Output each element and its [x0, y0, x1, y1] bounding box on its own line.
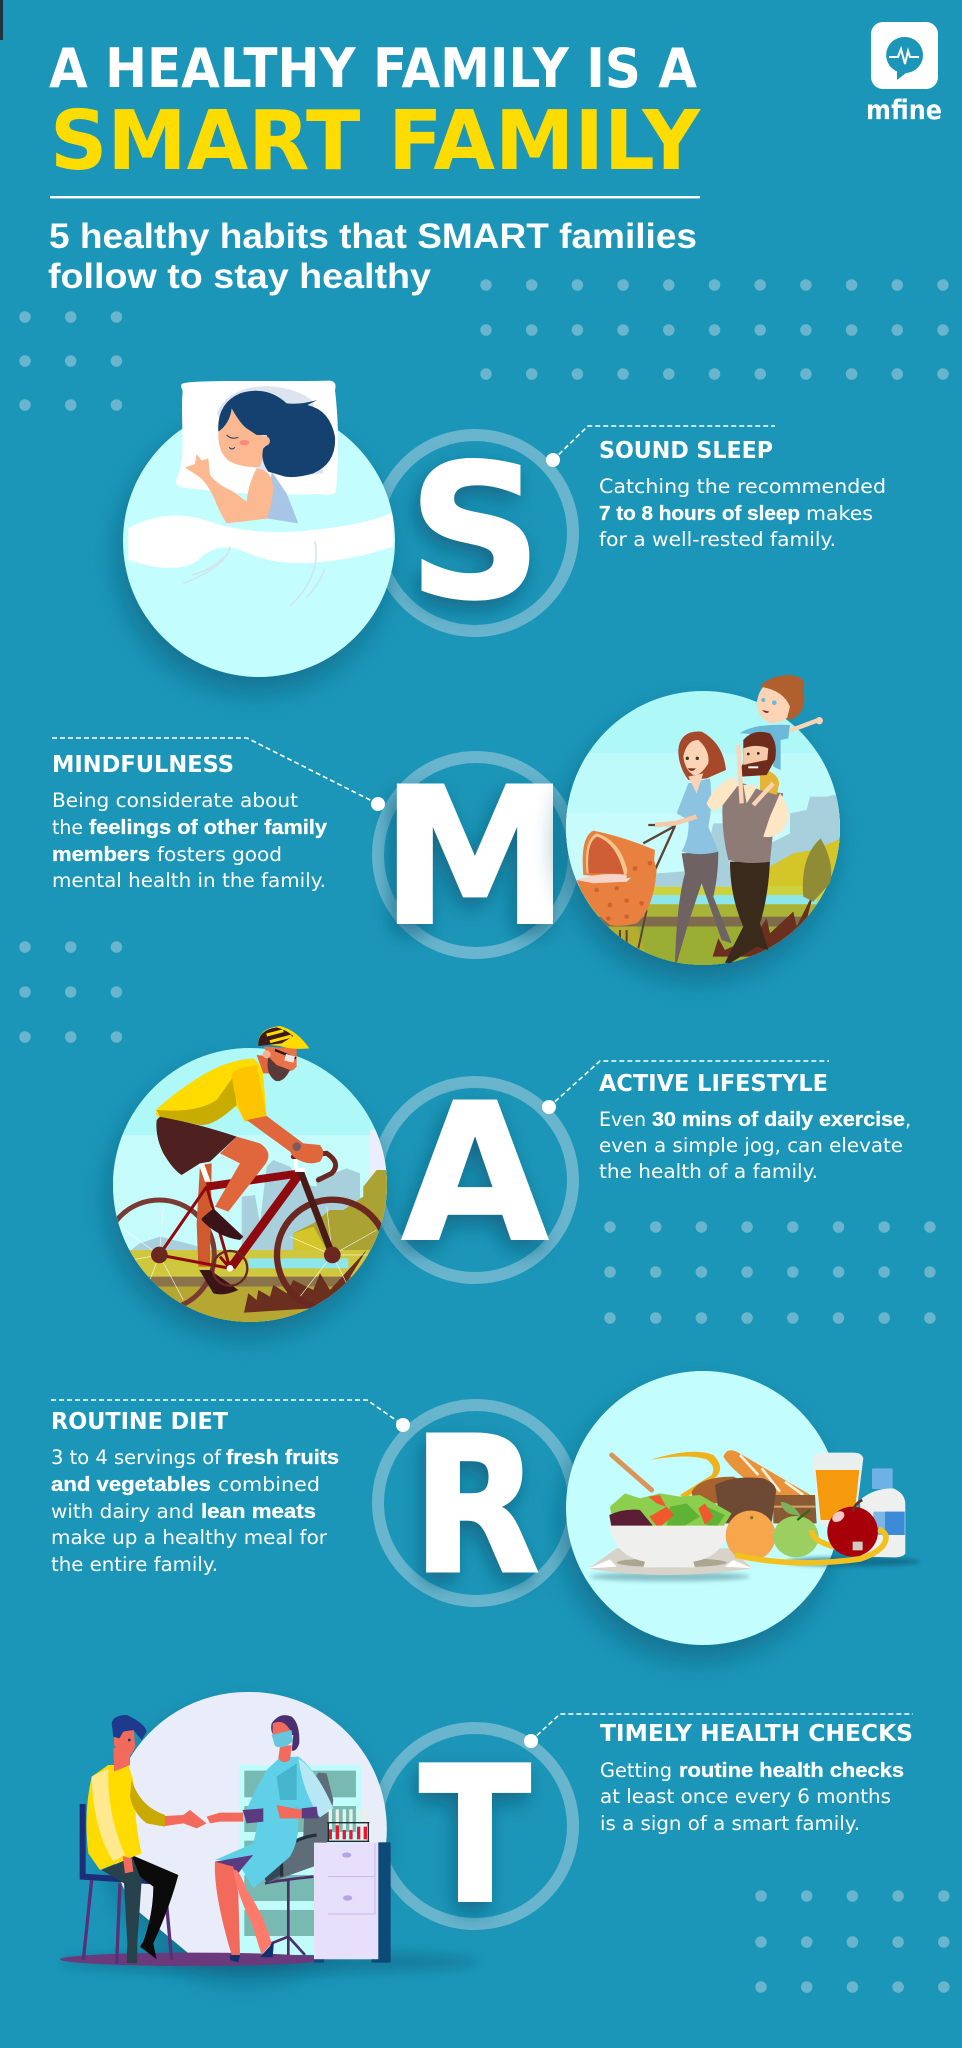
- connector: R: [51, 1400, 403, 1425]
- letter R: R: [412, 1397, 540, 1616]
- text: active lifestyle: ACTIVE LIFESTYLE: [599, 1071, 828, 1097]
- letter S: S: [408, 424, 542, 641]
- text: routine diet: 3 to 4 servings of: [51, 1446, 222, 1469]
- subtitle: 5 healthy habits that SMART families: [49, 217, 697, 256]
- text: active lifestyle: Even: [599, 1108, 646, 1131]
- panel: A active lifestyle: [104, 1026, 911, 1337]
- ring: R: [378, 1405, 574, 1601]
- text: mindfulness: feelings of other family: [89, 816, 328, 839]
- text: routine diet: combined: [218, 1473, 320, 1496]
- text: mindfulness: MINDFULNESS: [52, 752, 234, 778]
- illustration: family walking: [566, 675, 840, 965]
- title: [49, 37, 702, 189]
- text: routine diet: make up a healthy meal for: [51, 1526, 328, 1549]
- text: timely health checks: at least once every 6 months: [600, 1785, 891, 1808]
- text: sound sleep: Catching the recommended: [599, 475, 886, 498]
- text: mindfulness: mental health in the family.: [52, 869, 326, 892]
- text: active lifestyle: 30 mins of daily exercise: [652, 1108, 905, 1131]
- text: routine diet: the entire family.: [51, 1553, 218, 1576]
- illustration: doctor and patient: [60, 1692, 391, 1966]
- ring: S: [377, 435, 573, 631]
- text: active lifestyle: ,: [905, 1108, 911, 1131]
- panel: S sound sleep: [118, 381, 886, 692]
- title: SMART FAMILY: [50, 94, 702, 189]
- dot pattern: top right: [486, 285, 950, 374]
- text: active lifestyle: the health of a family.: [599, 1160, 818, 1183]
- connector: S: [553, 426, 775, 460]
- text: timely health checks: [600, 1721, 913, 1835]
- text: sound sleep: for a well-rested family.: [599, 528, 836, 551]
- letter T: T: [420, 1728, 530, 1945]
- subtitle: [48, 217, 697, 296]
- ring: A: [377, 1082, 573, 1278]
- connector: A: [549, 1061, 829, 1107]
- connector: T: [531, 1714, 913, 1741]
- letter M: M: [380, 747, 570, 968]
- text: timely health checks: is a sign of a smart family.: [600, 1812, 860, 1835]
- illustration: sleeping woman: [123, 381, 395, 677]
- dot pattern: bottom right: [761, 1896, 947, 1987]
- illustration: cyclist: [104, 1026, 393, 1327]
- text: timely health checks: routine health checks: [679, 1759, 904, 1782]
- text: timely health checks: TIMELY HEALTH CHECKS: [600, 1721, 913, 1747]
- text: routine diet: ROUTINE DIET: [51, 1409, 228, 1435]
- dot pattern: middle right: [610, 1227, 935, 1318]
- illustration: healthy food: [566, 1371, 920, 1645]
- text: timely health checks: Getting: [600, 1759, 672, 1782]
- text: routine diet: and vegetables: [51, 1473, 211, 1496]
- title: A HEALTHY FAMILY IS A: [49, 37, 697, 100]
- text: active lifestyle: even a simple jog, can elevate: [599, 1134, 903, 1157]
- text: sound sleep: [599, 438, 886, 551]
- panel: T timely health checks: [60, 1692, 913, 1981]
- text: routine diet: with dairy and: [51, 1500, 194, 1523]
- ring: M: [378, 757, 574, 953]
- text: mindfulness: fosters good: [157, 843, 282, 866]
- ring: T: [377, 1728, 573, 1924]
- text: mindfulness: the: [52, 816, 83, 839]
- text: routine diet: fresh fruits: [226, 1446, 339, 1469]
- text: mindfulness: members: [52, 843, 150, 866]
- dot pattern: top left: [25, 317, 120, 405]
- text: sound sleep: 7 to 8 hours of sleep: [599, 502, 800, 525]
- text: active lifestyle: [599, 1071, 911, 1183]
- logo: mfine: mfine: [866, 95, 942, 126]
- text: routine diet: [51, 1409, 339, 1576]
- text: routine diet: lean meats: [201, 1500, 316, 1523]
- logo: mfine: [866, 22, 942, 126]
- dot pattern: middle left: [25, 947, 120, 1037]
- panel: M mindfulness: [52, 675, 860, 987]
- connector: M: [52, 738, 378, 804]
- subtitle: follow to stay healthy: [48, 257, 432, 296]
- text: sound sleep: makes: [806, 502, 873, 525]
- text: sound sleep: SOUND SLEEP: [599, 438, 773, 464]
- letter A: A: [401, 1063, 549, 1284]
- panel: R routine diet: [51, 1371, 920, 1660]
- text: mindfulness: [52, 752, 328, 892]
- text: mindfulness: Being considerate about: [52, 789, 298, 812]
